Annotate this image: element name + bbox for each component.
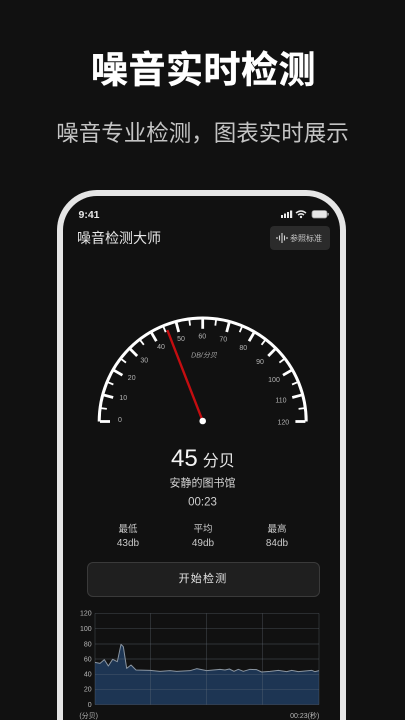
gauge scale labels: 90: [256, 359, 264, 366]
chart area: [95, 644, 319, 705]
status bar icons: [281, 210, 329, 218]
start button: 开始检测: [179, 572, 227, 584]
line chart: 00:23(秒): [290, 711, 319, 720]
stat: maximum: [266, 524, 288, 549]
stat: average: 49db: [192, 538, 214, 549]
needle hub: [199, 418, 206, 424]
chart y axis labels: 40: [84, 672, 92, 679]
gauge scale labels: 50: [177, 336, 185, 343]
app title: 噪音检测大师: [77, 230, 161, 246]
stat: minimum: [117, 524, 139, 549]
gauge scale labels: 60: [198, 334, 206, 340]
chart grid: [95, 613, 319, 705]
gauge scale labels: 10: [119, 395, 127, 402]
stat: maximum: 最高: [267, 524, 286, 535]
gauge scale labels: 120: [277, 420, 289, 426]
gauge scale labels: 100: [268, 377, 280, 384]
chart line: [95, 644, 319, 672]
start button: [86, 562, 320, 596]
chart y axis labels: 0: [88, 702, 92, 709]
gauge unit label: DB/分贝: [191, 352, 218, 360]
button label: 参照标准: [290, 234, 322, 242]
stat: maximum: 84db: [266, 538, 288, 549]
gauge scale labels: 30: [140, 358, 148, 364]
chart y axis labels: 60: [84, 656, 92, 663]
needle: [167, 330, 203, 421]
title: 噪音实时检测: [91, 50, 316, 90]
gauge scale labels: 70: [219, 336, 227, 344]
environment description: 安静的图书馆: [170, 478, 236, 490]
stat: minimum: 最低: [118, 524, 138, 535]
chart y axis labels: 120: [80, 611, 92, 618]
phone frame: [57, 190, 346, 720]
stat: average: 平均: [193, 524, 212, 535]
stat: average: [192, 524, 214, 549]
gauge scale labels: 40: [157, 344, 165, 351]
line chart: [79, 610, 320, 720]
status bar time: 9:41: [78, 208, 100, 220]
current decibel reading: 45 分贝: [171, 445, 235, 472]
gauge: [98, 316, 308, 426]
subtitle: 噪音专业检测，图表实时展示: [56, 120, 349, 145]
chart y axis labels: [80, 611, 92, 709]
gauge scale labels: 20: [128, 375, 136, 382]
gauge arc and ticks: [99, 318, 306, 422]
chart y axis labels: 80: [84, 641, 92, 648]
chart y axis labels: 100: [80, 626, 92, 633]
gauge scale labels: 80: [239, 345, 247, 352]
gauge scale labels: [118, 334, 289, 426]
gauge scale labels: 110: [275, 398, 287, 404]
stat: minimum: 43db: [117, 538, 139, 549]
reference standard button: [270, 226, 330, 250]
chart y axis labels: 20: [84, 687, 92, 694]
gauge scale labels: 0: [118, 417, 122, 424]
chart x axis labels: (分贝): [79, 711, 98, 720]
icon: sound wave: [276, 233, 288, 243]
elapsed time: 00:23: [188, 496, 217, 508]
